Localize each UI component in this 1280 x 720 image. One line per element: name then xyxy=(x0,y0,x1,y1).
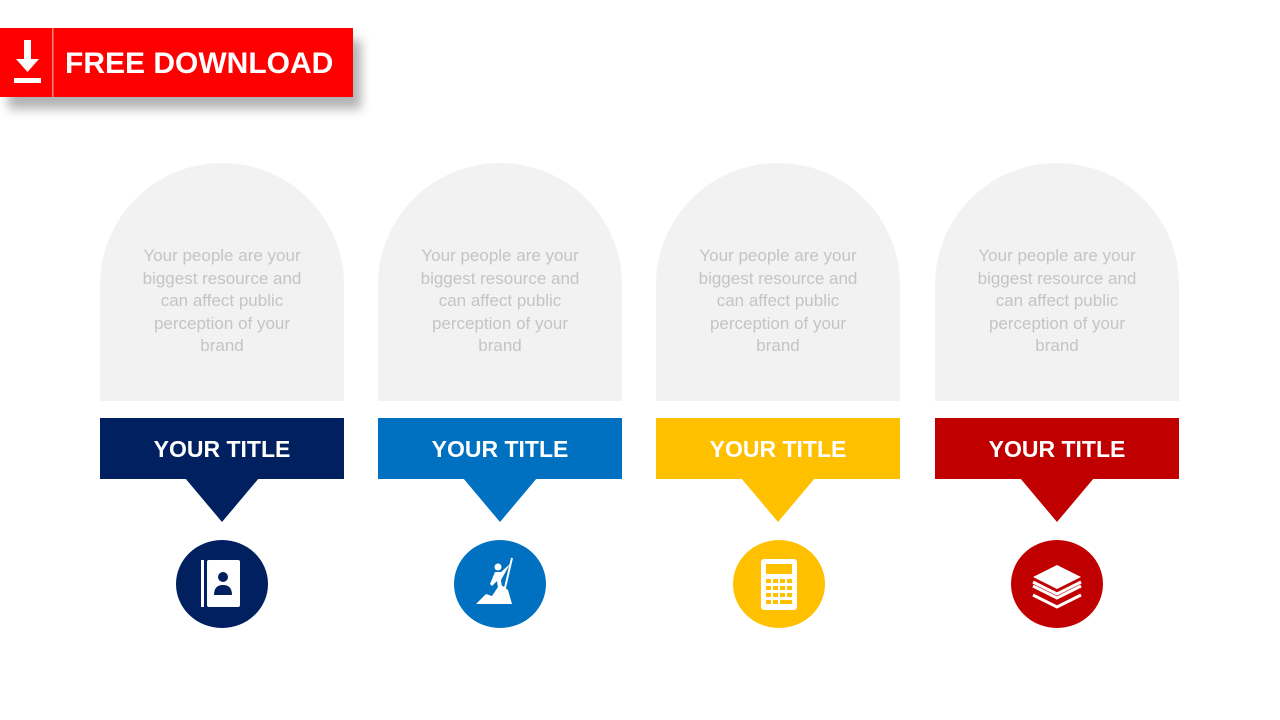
title bar 4: YOUR TITLE xyxy=(989,436,1125,462)
panel: card 2: can affect public xyxy=(439,291,561,310)
panel: card 1: brand xyxy=(200,336,244,355)
title bar 3: YOUR TITLE xyxy=(710,436,846,462)
panel: card 1: can affect public xyxy=(161,291,283,310)
panel: card 1: Your people are your xyxy=(143,246,301,265)
banner: free download xyxy=(0,28,353,97)
title bar 4 xyxy=(935,418,1179,479)
icon: download arrow xyxy=(14,28,54,97)
panel: card 4: biggest resource and xyxy=(978,268,1136,288)
icon: books xyxy=(1011,540,1103,628)
panel: card 3: Your people are your xyxy=(699,246,857,265)
panel: card 2: Your people are your xyxy=(421,246,579,265)
icon: climber xyxy=(454,540,546,628)
banner text: FREE DOWNLOAD xyxy=(65,47,333,80)
panel: card 4: Your people are your xyxy=(978,246,1136,265)
panel: card 3: biggest resource and xyxy=(699,268,857,288)
panel: card 4 xyxy=(935,163,1179,401)
panel: card 4: perception of your xyxy=(989,314,1125,332)
title bar 1 xyxy=(100,418,344,479)
title bar 2: YOUR TITLE xyxy=(432,436,568,462)
panel: card 2: perception of your xyxy=(432,314,568,332)
panel: card 3 xyxy=(656,163,900,401)
panel: card 2: biggest resource and xyxy=(421,268,579,288)
icon: contact book xyxy=(176,540,268,628)
panel: card 4: can affect public xyxy=(996,291,1118,310)
panel: card 1 xyxy=(100,163,344,401)
panel: card 2: brand xyxy=(478,336,522,355)
panel: card 3: perception of your xyxy=(710,314,846,332)
title bar 3 xyxy=(656,418,900,479)
panel: card 3: can affect public xyxy=(717,291,839,310)
panel: card 2 xyxy=(378,163,622,401)
panel: card 4: brand xyxy=(1035,336,1079,355)
title bar 2 xyxy=(378,418,622,479)
icon: calculator xyxy=(733,540,825,628)
title bar 1: YOUR TITLE xyxy=(154,436,290,462)
panel: card 1: biggest resource and xyxy=(143,268,301,288)
panel: card 3: brand xyxy=(756,336,800,355)
panel: card 1: perception of your xyxy=(154,314,290,332)
